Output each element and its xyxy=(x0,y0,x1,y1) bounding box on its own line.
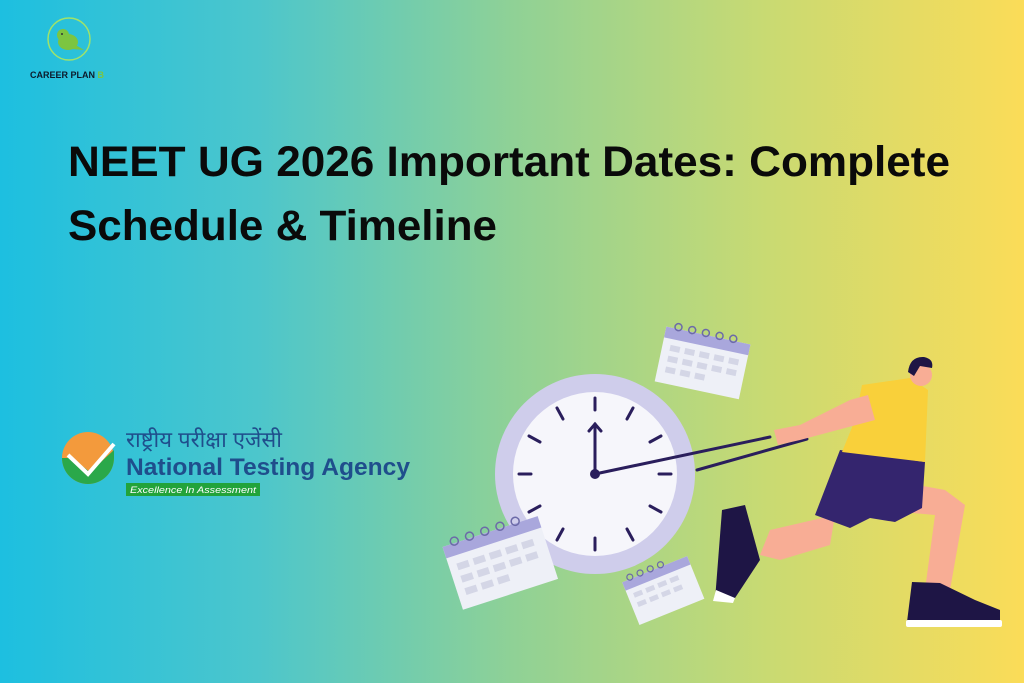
back shoe xyxy=(715,505,760,600)
logo: National Testing Agency: राष्ट्रीय परीक्षा एजेंसी xyxy=(126,427,282,452)
shorts xyxy=(815,450,925,528)
icon: calendar bottom-left xyxy=(441,510,558,610)
logo: National Testing Agency: Excellence In Assessment xyxy=(130,485,256,496)
front shoe xyxy=(907,582,1000,622)
arm xyxy=(774,395,875,445)
icon: NTA check circle xyxy=(62,432,114,484)
logo: career plan xyxy=(30,17,105,80)
title: Schedule & Timeline xyxy=(68,202,497,250)
icon: calendar small xyxy=(620,551,704,625)
icon: clock xyxy=(495,374,695,574)
illustration: man pulling clock xyxy=(442,322,1002,627)
front leg xyxy=(880,480,965,590)
shirt xyxy=(842,378,928,462)
logo: National Testing Agency xyxy=(62,427,411,496)
title: NEET UG 2026 Important Dates: Complete xyxy=(68,138,950,186)
brand text: CAREER PLAN B xyxy=(30,70,105,80)
logo: National Testing Agency: National Testing Agency xyxy=(126,454,411,481)
title xyxy=(68,138,950,250)
icon: calendar top xyxy=(655,321,752,399)
icon: bird in circle xyxy=(48,18,90,60)
person xyxy=(713,357,1002,627)
ropes / minute hand xyxy=(595,437,807,474)
back leg xyxy=(760,515,835,560)
head xyxy=(910,364,932,386)
